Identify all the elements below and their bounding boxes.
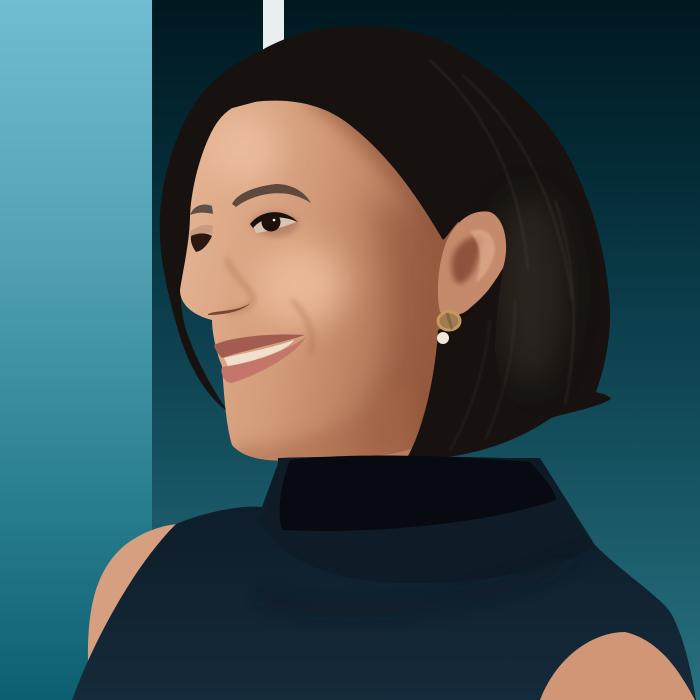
shadow: jaw <box>360 196 458 450</box>
upper lip <box>214 335 305 358</box>
eye far: lid <box>190 225 213 236</box>
earring: gold knot <box>438 312 460 330</box>
hair: brown sheen <box>495 195 565 385</box>
lower lip <box>221 337 306 383</box>
shadow: chin underside <box>235 419 404 461</box>
face <box>180 90 470 461</box>
hair: lower lock beside neck <box>408 268 551 457</box>
hair: lock strands <box>450 300 515 450</box>
shoulder right <box>540 632 695 700</box>
teeth <box>224 340 294 366</box>
eye near: white <box>253 216 296 233</box>
eye near: socket shadow <box>250 212 300 237</box>
collar top fold <box>280 456 556 531</box>
background: white vertical strip <box>263 0 284 50</box>
eye near <box>250 212 300 237</box>
eyebrow near <box>232 184 311 207</box>
eye near: iris <box>262 212 280 232</box>
earring <box>437 312 460 344</box>
highlight: cheek <box>254 243 346 327</box>
eye near: upper lash <box>250 212 298 228</box>
highlight: forehead <box>209 114 281 186</box>
face shading <box>200 104 459 461</box>
eyebrow far <box>190 204 213 215</box>
smile line <box>292 300 312 354</box>
ear highlight <box>470 230 495 282</box>
eye far: iris <box>191 233 212 252</box>
background: left teal gradient panel <box>0 0 152 700</box>
ear inner <box>452 237 484 284</box>
eye near: glint <box>273 219 275 221</box>
eye far <box>190 225 213 252</box>
ear <box>438 211 506 315</box>
hair: sheen strands <box>430 60 574 405</box>
shoulder left <box>88 524 178 662</box>
hair: back mass <box>160 26 611 459</box>
collar shadow <box>258 548 590 615</box>
earring: center bar <box>447 313 452 329</box>
hair: top and side sweep over forehead <box>197 26 510 240</box>
nostril <box>208 303 250 315</box>
neck <box>288 360 440 470</box>
shadow: temple near hair <box>302 104 434 228</box>
collar <box>258 456 595 583</box>
dress body <box>72 458 696 700</box>
lips <box>214 335 306 383</box>
earring: pearl <box>437 332 449 344</box>
nose shadow <box>226 258 253 312</box>
